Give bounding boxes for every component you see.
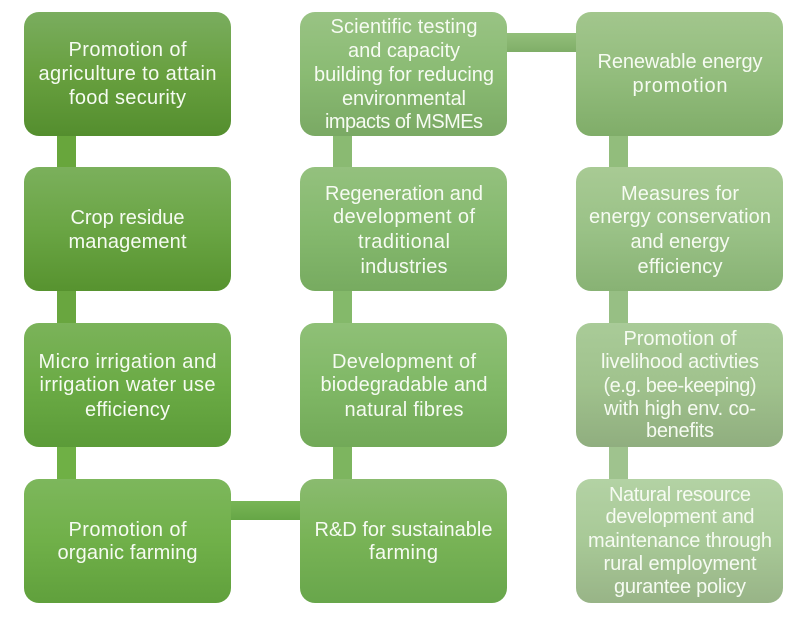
box: crop residue management (24, 167, 231, 291)
box: regeneration of traditional industries: traditional (358, 231, 450, 253)
box: scientific testing and capacity building: and capacity (348, 40, 460, 62)
connector: crop residue to micro irrigation (57, 291, 76, 323)
connector: energy conservation to livelihood (609, 291, 628, 323)
box: regeneration of traditional industries: development of (333, 206, 475, 228)
box: energy conservation and efficiency (576, 167, 783, 291)
box: natural resource development: Natural resource (609, 484, 751, 506)
box: energy conservation and efficiency: and energy (630, 231, 730, 253)
box: promotion of organic farming: organic farming (58, 542, 198, 564)
box: renewable energy promotion: Renewable energy (598, 51, 762, 73)
box: renewable energy promotion: promotion (632, 75, 728, 97)
box: renewable energy promotion (576, 12, 783, 136)
box: biodegradable and natural fibres: natural fibres (344, 399, 464, 421)
box: biodegradable and natural fibres: Development of (332, 351, 476, 373)
box: micro irrigation (24, 323, 231, 447)
connector: biodegradable fibres to regeneration (333, 291, 352, 323)
box: livelihood activities: livelihood activties (601, 351, 759, 373)
connector: organic farming to R&D (231, 501, 300, 520)
box: R&D for sustainable farming (300, 479, 507, 603)
box: promotion of organic farming: Promotion of (68, 519, 187, 541)
connector: agriculture to crop residue (57, 136, 76, 167)
box: regeneration of traditional industries: Regeneration and (325, 183, 483, 205)
connector: R&D to biodegradable fibres (333, 447, 352, 479)
box: crop residue management: Crop residue (70, 207, 184, 229)
box: natural resource development: maintenance through (588, 530, 772, 552)
connector: livelihood to natural resource (609, 447, 628, 479)
connector: renewable energy to energy conservation (609, 136, 628, 167)
box: energy conservation and efficiency: efficiency (638, 256, 722, 278)
box: scientific testing and capacity building: Scientific testing (330, 16, 478, 38)
box: natural resource development: rural employment (604, 553, 757, 575)
box: promotion of organic farming (24, 479, 231, 603)
box: natural resource development: gurantee policy (614, 576, 746, 598)
box: livelihood activities: (e.g. bee-keeping) (604, 375, 756, 397)
box: energy conservation and efficiency: Measures for (621, 183, 739, 205)
connector: micro irrigation to organic farming (57, 447, 76, 479)
box: crop residue management: management (68, 231, 187, 253)
box: R&D for sustainable farming: farming (369, 542, 438, 564)
box: R&D for sustainable farming: R&D for sustainable (314, 519, 492, 541)
box: promotion of agriculture: food security (69, 87, 186, 109)
box: promotion of agriculture: agriculture to attain (38, 63, 216, 85)
box: promotion of agriculture: Promotion of (68, 39, 187, 61)
box: regeneration of traditional industries: industries (360, 256, 448, 278)
box: micro irrigation: efficiency (85, 399, 170, 421)
connector: scientific testing to renewable energy (507, 33, 576, 52)
box: livelihood activities: with high env. co- (603, 398, 756, 420)
box: livelihood activities: benefits (646, 420, 714, 442)
box: promotion of agriculture (24, 12, 231, 136)
box: micro irrigation: irrigation water use (40, 374, 216, 396)
box: scientific testing and capacity building (300, 12, 507, 136)
box: scientific testing and capacity building: impacts of MSMEs (325, 111, 483, 133)
box: livelihood activities: Promotion of (624, 328, 737, 350)
box: livelihood activities (576, 323, 783, 447)
box: natural resource development: development and (606, 506, 754, 528)
box: natural resource development (576, 479, 783, 603)
box: biodegradable and natural fibres (300, 323, 507, 447)
box: scientific testing and capacity building: environmental (342, 88, 466, 110)
box: scientific testing and capacity building: building for reducing (314, 64, 494, 86)
box: micro irrigation: Micro irrigation and (38, 351, 216, 373)
box: biodegradable and natural fibres: biodegradable and (320, 374, 488, 396)
connector: regeneration to scientific testing (333, 136, 352, 167)
box: regeneration of traditional industries (300, 167, 507, 291)
box: energy conservation and efficiency: energy conservation (589, 206, 771, 228)
